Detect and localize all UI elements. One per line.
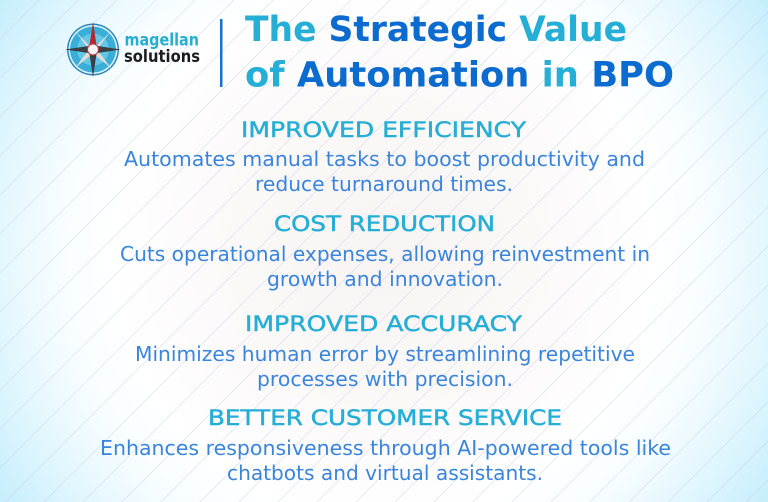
section: improved accuracy: IMPROVED ACCURACY [245, 312, 523, 337]
section: improved efficiency [124, 118, 645, 196]
section: improved efficiency: IMPROVED EFFICIENCY [241, 118, 527, 143]
section: cost reduction: Cuts operational expenses, allowing reinvestment in [120, 242, 650, 266]
section: improved accuracy: processes with precision. [257, 367, 513, 391]
title: of Automation in BPO [245, 56, 674, 96]
section: cost reduction: COST REDUCTION [274, 212, 495, 237]
section: improved efficiency: Automates manual tasks to boost productivity and [124, 147, 645, 171]
section: improved accuracy: Minimizes human error by streamlining repetitive [135, 342, 635, 366]
section: improved accuracy [135, 312, 635, 391]
section: better customer service: BETTER CUSTOMER SERVICE [208, 406, 562, 431]
logo wordmark [124, 30, 200, 67]
title [245, 10, 674, 96]
section: better customer service: Enhances responsiveness through AI-powered tools like [100, 436, 671, 460]
logo: magellan solutions [65, 22, 200, 77]
logo wordmark: magellan [124, 30, 199, 50]
section: cost reduction [120, 212, 650, 291]
title: The Strategic Value [245, 10, 627, 50]
icon: compass [65, 22, 121, 77]
section: improved efficiency: reduce turnaround times. [255, 172, 513, 196]
section: better customer service: chatbots and virtual assistants. [227, 461, 543, 485]
section: better customer service [100, 406, 671, 485]
section: cost reduction: growth and innovation. [267, 267, 503, 291]
header divider [220, 19, 222, 87]
logo wordmark: solutions [124, 47, 200, 67]
